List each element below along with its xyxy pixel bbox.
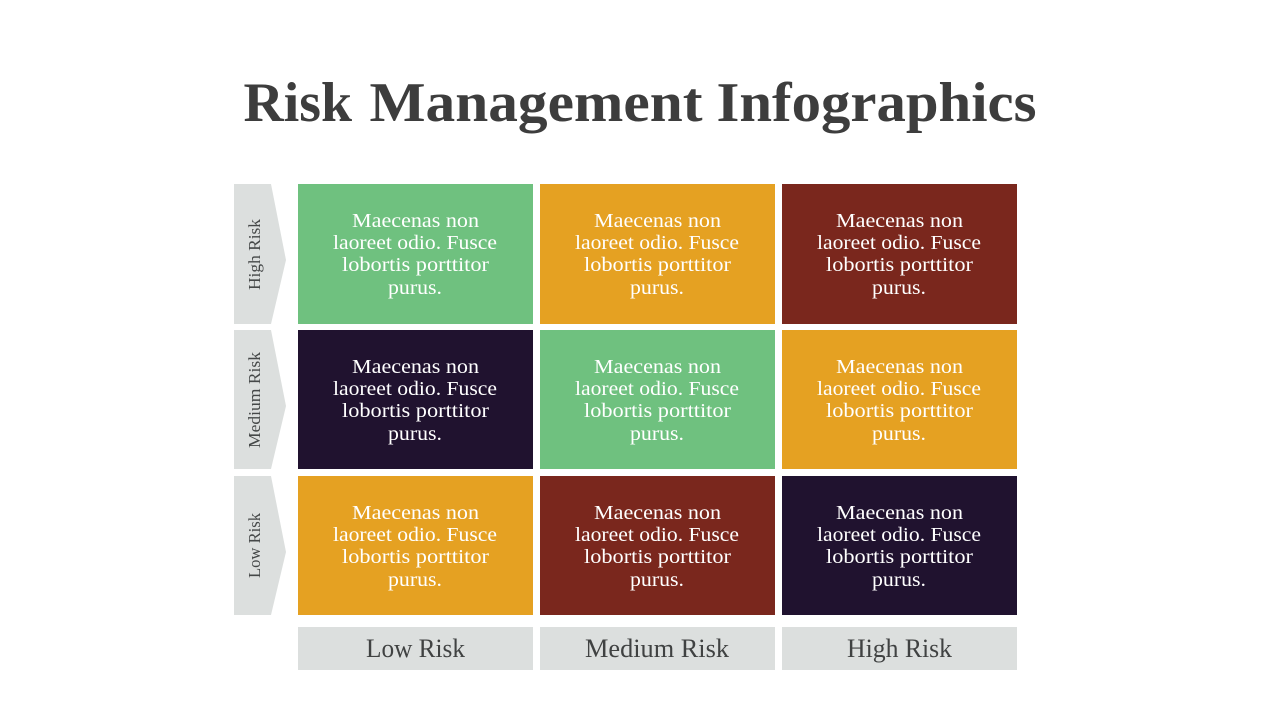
column label: Medium Risk <box>540 627 775 670</box>
cell: medium risk row, low risk column: lobortis porttitor <box>342 400 489 422</box>
cell: low risk row, high risk column <box>782 476 1017 615</box>
row label arrow: Medium Risk: Medium Risk <box>245 351 264 448</box>
cell: low risk row, low risk column: lobortis porttitor <box>342 546 489 568</box>
title: Infographics <box>716 72 1036 134</box>
title: Risk <box>244 72 353 134</box>
title: Management <box>370 72 703 134</box>
cell: low risk row, high risk column: lobortis porttitor <box>826 546 973 568</box>
cell: high risk row, low risk column: lobortis porttitor <box>342 254 489 276</box>
column label: Medium Risk: Medium Risk <box>585 634 729 663</box>
cell: low risk row, low risk column: Maecenas non <box>352 502 479 524</box>
cell: medium risk row, low risk column: laoreet odio. Fusce <box>333 378 497 400</box>
column label: Low Risk: Low Risk <box>366 634 465 663</box>
cell: low risk row, high risk column: laoreet odio. Fusce <box>817 524 981 546</box>
cell: medium risk row, medium risk column: purus. <box>630 423 684 445</box>
cell: low risk row, high risk column: purus. <box>872 569 926 591</box>
cell: high risk row, medium risk column: Maecenas non <box>594 210 721 232</box>
cell: high risk row, low risk column: Maecenas non <box>352 210 479 232</box>
cell: medium risk row, medium risk column: laoreet odio. Fusce <box>575 378 739 400</box>
cell: high risk row, medium risk column <box>540 184 775 324</box>
cell: high risk row, high risk column <box>782 184 1017 324</box>
cell: low risk row, medium risk column <box>540 476 775 615</box>
cell: medium risk row, medium risk column: lobortis porttitor <box>584 400 731 422</box>
cell: high risk row, low risk column: laoreet odio. Fusce <box>333 232 497 254</box>
cell: medium risk row, high risk column: lobortis porttitor <box>826 400 973 422</box>
title <box>244 72 1036 134</box>
cell: medium risk row, low risk column: purus. <box>388 423 442 445</box>
cell: low risk row, low risk column: laoreet odio. Fusce <box>333 524 497 546</box>
cell: high risk row, low risk column: purus. <box>388 277 442 299</box>
cell: high risk row, medium risk column: lobortis porttitor <box>584 254 731 276</box>
row label arrow: Low Risk: Low Risk <box>245 513 264 578</box>
cell: low risk row, high risk column: Maecenas non <box>836 502 963 524</box>
row label arrow: Low Risk <box>234 476 286 615</box>
cell: high risk row, high risk column: purus. <box>872 277 926 299</box>
cell: high risk row, low risk column <box>298 184 533 324</box>
cell: medium risk row, high risk column: purus. <box>872 423 926 445</box>
row label arrow: High Risk <box>234 184 286 324</box>
cell: medium risk row, high risk column <box>782 330 1017 469</box>
cell: low risk row, medium risk column: laoreet odio. Fusce <box>575 524 739 546</box>
cell: low risk row, medium risk column: purus. <box>630 569 684 591</box>
cell: medium risk row, high risk column: Maecenas non <box>836 356 963 378</box>
cell: medium risk row, high risk column: laoreet odio. Fusce <box>817 378 981 400</box>
cell: low risk row, low risk column <box>298 476 533 615</box>
cell: high risk row, medium risk column: purus. <box>630 277 684 299</box>
cell: medium risk row, low risk column: Maecenas non <box>352 356 479 378</box>
column label: High Risk: High Risk <box>847 634 952 663</box>
cell: medium risk row, medium risk column: Maecenas non <box>594 356 721 378</box>
cell: high risk row, high risk column: laoreet odio. Fusce <box>817 232 981 254</box>
cell: high risk row, high risk column: lobortis porttitor <box>826 254 973 276</box>
cell: low risk row, low risk column: purus. <box>388 569 442 591</box>
row label arrow: High Risk: High Risk <box>245 218 264 290</box>
cell: low risk row, medium risk column: Maecenas non <box>594 502 721 524</box>
cell: high risk row, medium risk column: laoreet odio. Fusce <box>575 232 739 254</box>
cell: medium risk row, low risk column <box>298 330 533 469</box>
row label arrow: Medium Risk <box>234 330 286 469</box>
column label: High Risk <box>782 627 1017 670</box>
cell: medium risk row, medium risk column <box>540 330 775 469</box>
cell: high risk row, high risk column: Maecenas non <box>836 210 963 232</box>
cell: low risk row, medium risk column: lobortis porttitor <box>584 546 731 568</box>
column label: Low Risk <box>298 627 533 670</box>
